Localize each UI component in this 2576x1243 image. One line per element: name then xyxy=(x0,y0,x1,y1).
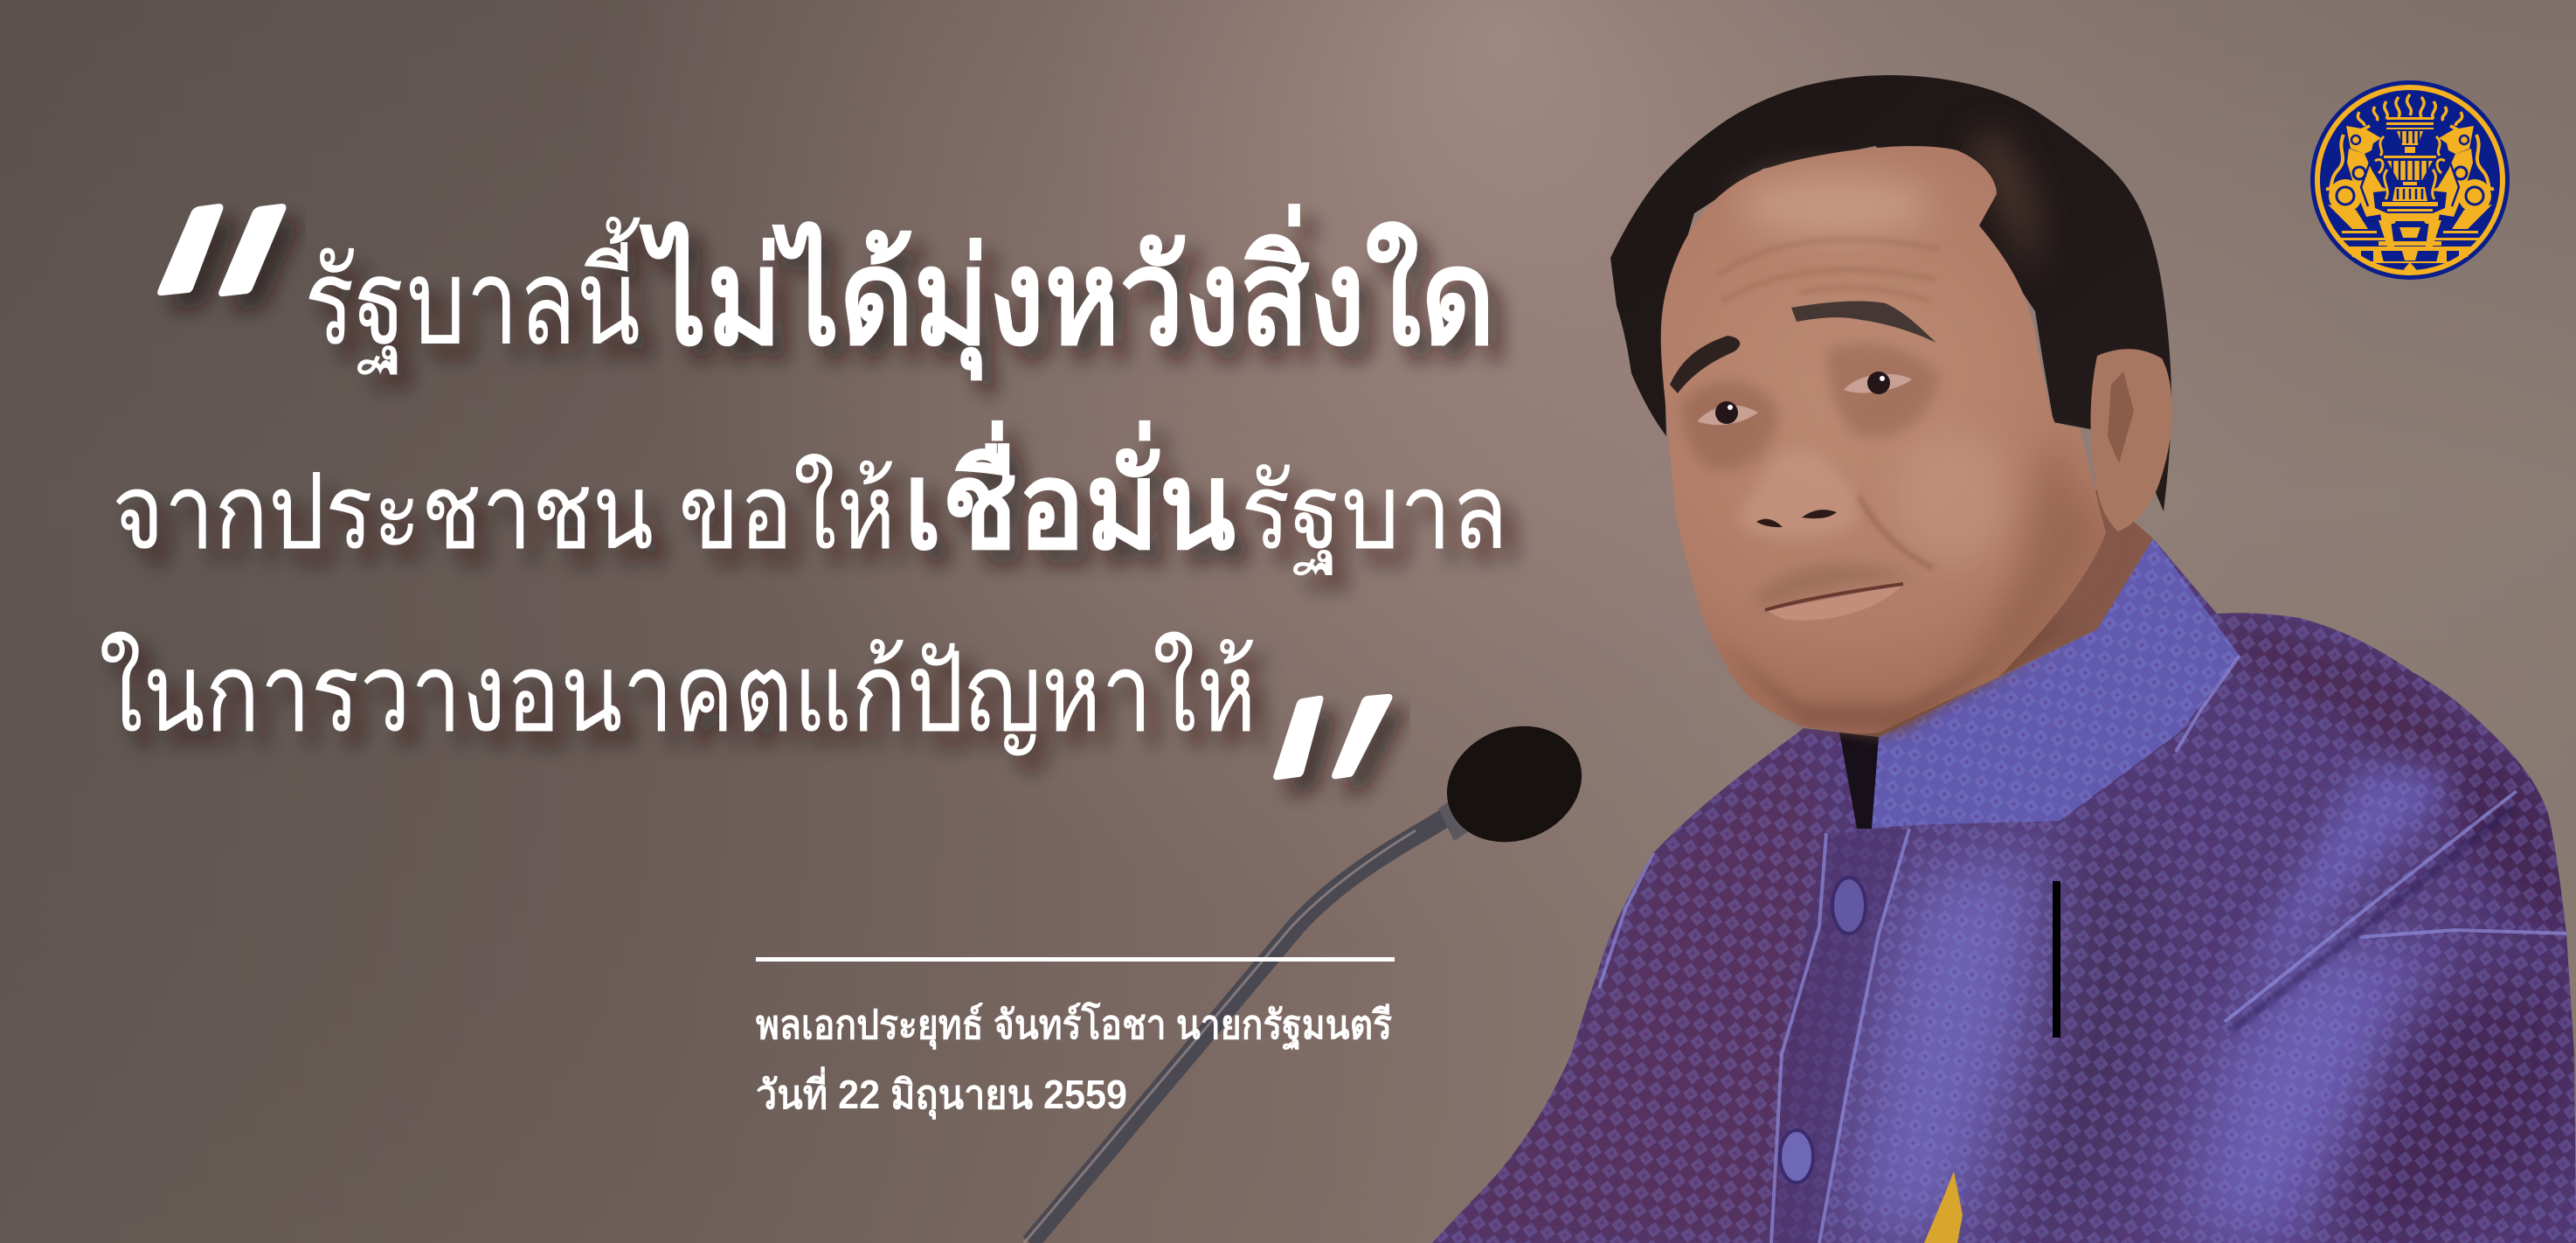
seal gold ring xyxy=(2317,87,2503,273)
left eye socket xyxy=(1682,382,1778,469)
seal vase xyxy=(2382,117,2438,212)
jacket: dark band beside placket xyxy=(2027,839,2158,1224)
mouth xyxy=(1765,584,1903,621)
left eyebrow xyxy=(1670,336,1740,393)
face xyxy=(1661,146,2106,733)
quotation mark: opening xyxy=(157,204,286,296)
jacket: shoulder shading xyxy=(2221,614,2566,931)
black vertical bar xyxy=(2053,881,2060,1038)
quote line 2 lead: จากประชาชน ขอให้ xyxy=(112,454,896,571)
quotation mark: closing xyxy=(1273,694,1392,780)
jacket: upper sleeve highlight xyxy=(2237,769,2473,988)
face: forehead highlight xyxy=(1739,175,1931,236)
neck xyxy=(1839,490,2153,737)
ear inner xyxy=(2108,372,2134,463)
attribution name: พลเอกประยุทธ์ จันทร์โอชา นายกรัฐมนตรี xyxy=(756,1001,1392,1051)
right eye socket xyxy=(1826,344,1940,437)
jacket: upper sleeve seam xyxy=(2230,809,2512,1031)
jacket: chest highlight xyxy=(1844,839,2045,1243)
seal table xyxy=(2379,213,2441,247)
jacket: collar xyxy=(1872,538,2240,829)
right eye xyxy=(1844,372,1912,394)
ear xyxy=(2090,349,2172,531)
quote line 3: ในการวางอนาคตแก้ปัญหาให้ xyxy=(99,631,1257,756)
nose xyxy=(1739,449,1858,538)
forehead wrinkles xyxy=(1717,240,1940,302)
government seal xyxy=(2310,80,2510,280)
jacket: front placket xyxy=(1771,829,1909,1243)
microphone stem highlight xyxy=(1024,830,1416,1243)
neck shadow xyxy=(1809,612,2080,737)
attribution divider xyxy=(756,957,1395,962)
microphone collar xyxy=(1438,794,1477,841)
jacket: dark neck gap xyxy=(1839,733,1879,829)
moustache shading xyxy=(1752,564,1914,608)
right eyebrow xyxy=(1791,302,1936,343)
seal lion left xyxy=(2326,126,2389,229)
seal scrolls beside vase xyxy=(2380,136,2440,199)
seal lion right xyxy=(2431,126,2494,229)
quote line 2 tail: รัฐบาล xyxy=(1241,454,1508,576)
gold pin xyxy=(1924,1171,1963,1243)
hair xyxy=(1610,75,2171,511)
left eye xyxy=(1697,401,1758,425)
microphone head xyxy=(1430,706,1599,862)
seal disc xyxy=(2310,80,2510,280)
jacket: dark folds xyxy=(2324,953,2576,1243)
quote line 1 xyxy=(304,206,1495,378)
face: cheek highlight xyxy=(1896,433,2010,564)
jacket: stitch lines xyxy=(1599,656,2570,1243)
jacket: sleeve highlight xyxy=(2176,944,2438,1243)
jacket: shaded left chest xyxy=(1432,728,1826,1243)
microphone xyxy=(1024,706,1599,1243)
quote line 2 xyxy=(112,420,1508,576)
button lower xyxy=(1780,1130,1813,1183)
face: right edge shading xyxy=(1957,428,2102,691)
jacket: textile weave xyxy=(1398,524,2576,1243)
face: under chin shading xyxy=(1713,638,2010,733)
seal flames xyxy=(2356,94,2464,133)
nasolabial fold xyxy=(1859,496,1934,568)
hair temple highlight xyxy=(1966,131,2036,280)
jacket xyxy=(1398,524,2576,1243)
quote line 1 emphasis: ไม่ได้มุ่งหวังสิ่งใด xyxy=(641,206,1495,378)
quote line 1 lead: รัฐบาลนี้ xyxy=(304,217,641,375)
microphone stem xyxy=(1030,815,1451,1243)
button upper xyxy=(1832,878,1866,934)
seal base and lower ornament xyxy=(2340,231,2480,275)
attribution date: วันที่ 22 มิถุนายน 2559 xyxy=(756,1066,1127,1120)
person: prime minister xyxy=(1398,75,2576,1243)
quote line 2 emphasis: เชื่อมั่น xyxy=(904,420,1236,574)
